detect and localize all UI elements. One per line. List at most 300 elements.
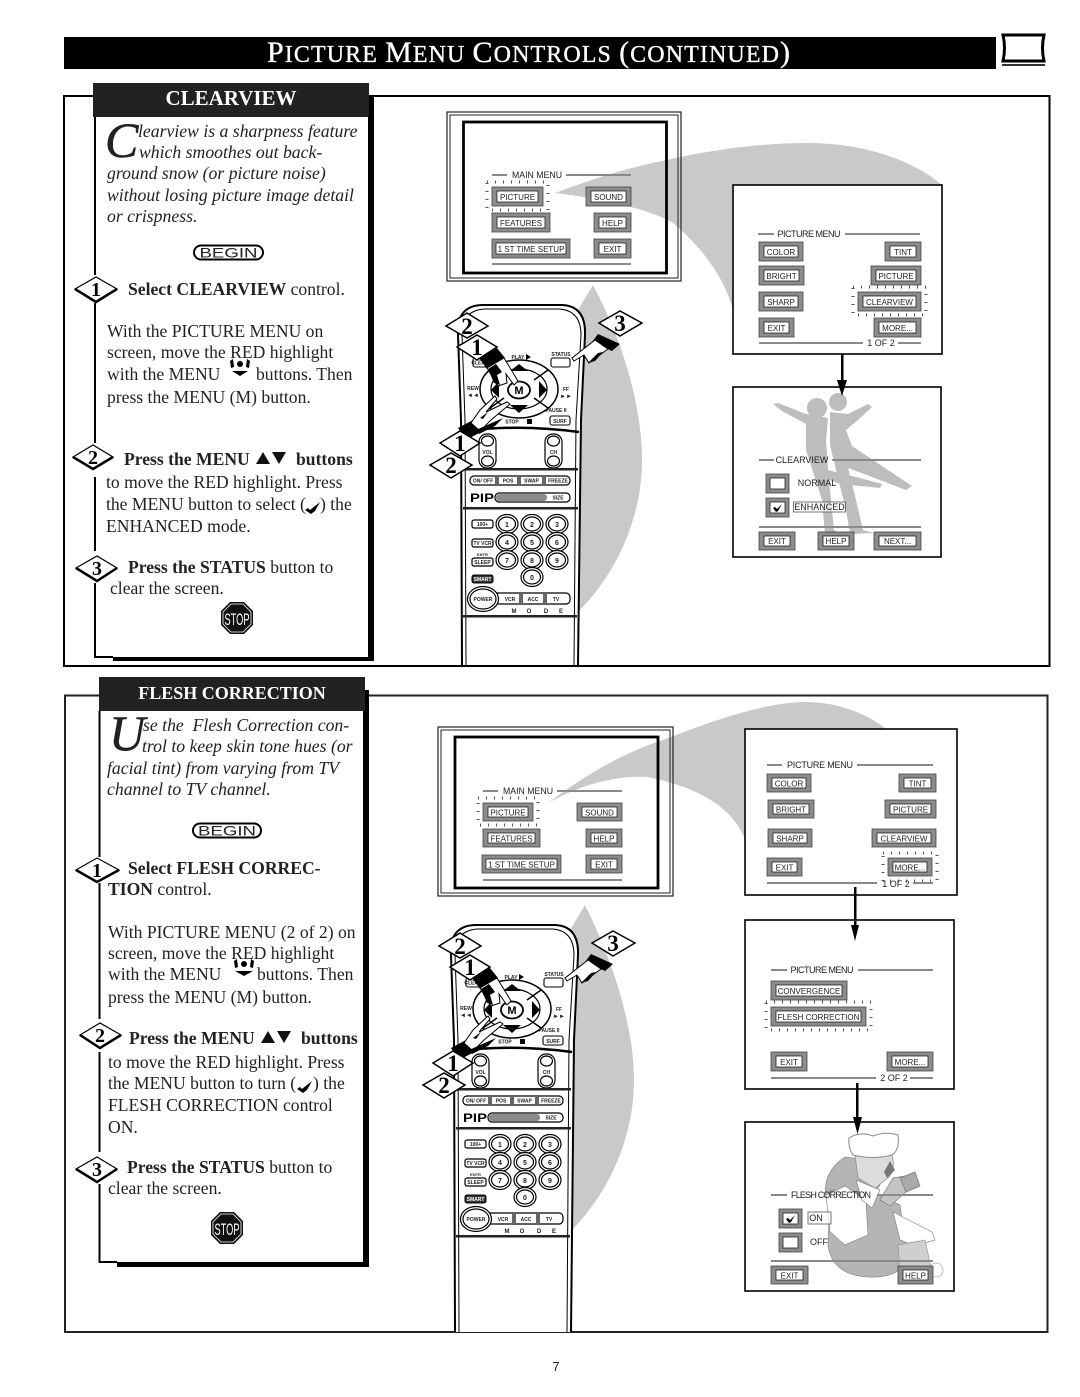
button: picture: PICTURE: [500, 193, 535, 202]
intro text: or crispness.: [107, 206, 197, 226]
title bar: [64, 36, 996, 69]
step 3 text: [110, 557, 333, 598]
top buttons: ►►: [560, 394, 572, 400]
remote control: flesh correction steps: [423, 925, 635, 1332]
number keys: 2: [530, 522, 534, 529]
power and mode keys: TV: [553, 597, 560, 603]
button: color: COLOR: [767, 248, 795, 257]
step markers on remote: [423, 931, 635, 1098]
pip controls: POS: [503, 478, 514, 484]
intro text: [107, 705, 353, 799]
picture menu screen: [733, 185, 942, 354]
menu title: PICTURE MENU: [787, 760, 853, 770]
number keys: 3: [555, 522, 559, 529]
checkbox: off: [779, 1233, 828, 1252]
hand: pressing status: [572, 334, 620, 363]
step 1 text: press the MENU (M) button.: [107, 387, 311, 407]
step 2 marker: [73, 445, 113, 469]
step 1 marker: 1: [91, 279, 101, 301]
illustration: sailor: [825, 1133, 943, 1280]
pip controls: [456, 1096, 571, 1130]
arrow: to flesh correction screen: [856, 1083, 858, 1119]
hand: pressing menu up: [479, 348, 518, 386]
number keys: 100+: [470, 1142, 481, 1148]
intro text: without losing picture image detail: [107, 185, 354, 205]
panel: clearview section frame: [64, 96, 1050, 666]
begin badge: [194, 244, 263, 260]
menu title: [492, 170, 631, 180]
top buttons: PAUSE II: [545, 408, 567, 414]
menu d-pad: [480, 360, 558, 418]
top buttons: FF: [556, 1007, 562, 1013]
top buttons: REW: [460, 1006, 472, 1012]
step 2 text: Press the MENU: [129, 1028, 255, 1048]
power and mode keys: ACC: [528, 597, 539, 603]
menu title: [483, 786, 622, 796]
number keys: 1: [498, 1142, 502, 1149]
step 1 text: screen, move the RED highlight: [107, 342, 333, 362]
begin badge: BEGIN: [200, 244, 258, 260]
number keys: SMART: [474, 577, 491, 583]
pip controls: ON/ OFF: [473, 478, 493, 484]
step 1 text: With PICTURE MENU (2 of 2) on: [108, 922, 356, 942]
pip controls: PIP: [470, 491, 494, 505]
step markers on remote: 1: [447, 1051, 459, 1076]
button: tint: TINT: [909, 780, 926, 788]
button: help: [898, 1266, 933, 1284]
main menu screen: [438, 727, 673, 896]
top buttons: REW: [467, 386, 479, 392]
step 2 text: Press the MENU: [124, 449, 250, 469]
step 3 text: Press the STATUS button to: [127, 1157, 332, 1177]
number keys: ENTR: [477, 552, 488, 557]
step 2 text: ENHANCED mode.: [106, 516, 251, 536]
intro text: se the Flesh Correction con-: [143, 715, 349, 735]
step 1 text: screen, move the RED highlight: [108, 943, 334, 963]
button: clearview: [872, 829, 936, 847]
step 2 text: to move the RED highlight. Press: [106, 472, 343, 492]
heading: clearview: [93, 83, 369, 117]
button: bright: [759, 266, 804, 285]
step 2 text: the MENU button to turn (: [108, 1073, 296, 1093]
step markers on remote: 1: [464, 955, 476, 980]
volume and channel keys: VOL: [482, 450, 493, 456]
step 2 text: the MENU button to select (: [106, 494, 306, 514]
button: tint: [899, 774, 936, 792]
checkbox: normal: NORMAL: [798, 478, 836, 488]
top buttons: PAUSE II: [538, 1028, 560, 1034]
hand: pressing menu up: [472, 968, 511, 1006]
step 2 marker: [80, 1023, 121, 1048]
top buttons: [467, 352, 572, 426]
gray swoosh from remote: [560, 285, 642, 612]
button: exit: EXIT: [768, 537, 786, 546]
button: more: [874, 318, 921, 337]
step markers on remote: 2: [438, 1073, 450, 1098]
begin badge: BEGIN: [198, 822, 256, 838]
step 1 marker: 1: [92, 860, 102, 882]
number keys: 3: [548, 1142, 552, 1149]
button: features: FEATURES: [500, 219, 542, 228]
button: picture: PICTURE: [878, 272, 914, 281]
button: flesh correction: [766, 1002, 871, 1030]
button: exit: EXIT: [780, 1058, 798, 1067]
button: sound: SOUND: [585, 808, 614, 818]
button: exit: EXIT: [595, 860, 613, 870]
button: convergence: CONVERGENCE: [778, 987, 840, 996]
button: help: HELP: [594, 834, 614, 844]
button: bright: BRIGHT: [776, 806, 806, 814]
number keys: 4: [498, 1160, 502, 1167]
intro text: facial tint) from varying from TV: [107, 758, 341, 778]
top buttons: SURF: [553, 419, 567, 425]
pip controls: SWAP: [517, 1098, 533, 1104]
button: bright: [768, 800, 814, 818]
step 1 marker: [75, 277, 117, 302]
button: picture: [871, 266, 921, 285]
icon: stop sign: STOP: [214, 1220, 240, 1239]
gray swoosh from remote: [552, 905, 634, 1232]
step markers on remote: [430, 311, 642, 478]
power and mode keys: ACC: [521, 1217, 532, 1223]
panel: flesh correction instructions: [76, 677, 369, 1267]
power and mode keys: TV: [546, 1217, 553, 1223]
checkbox: enhanced: [766, 498, 846, 517]
menu title: PICTURE MENU: [778, 229, 840, 239]
number keys: 5: [530, 540, 534, 547]
button: help: HELP: [826, 537, 846, 546]
number keys: 8: [530, 558, 534, 565]
picture menu screen page 1: [745, 729, 957, 895]
button: help: [818, 532, 854, 550]
power and mode keys: E: [559, 609, 563, 615]
top buttons: PLAY: [505, 975, 518, 981]
button: clearview: [853, 287, 926, 315]
top buttons: FF: [563, 387, 569, 393]
button: features: FEATURES: [490, 834, 533, 844]
page indicator: 1 OF 2: [882, 879, 910, 889]
intro text: C: [105, 112, 139, 168]
intro text: U: [109, 705, 148, 761]
power and mode keys: [456, 1206, 570, 1238]
intro text: channel to TV channel.: [107, 779, 271, 799]
button: exit: EXIT: [768, 324, 786, 333]
menu title: MAIN MENU: [512, 170, 562, 180]
icon: menu buttons: [234, 959, 254, 976]
hand: pressing status: [565, 954, 613, 983]
remote body: [458, 305, 585, 665]
gray swoosh from main menu to picture menu: [548, 702, 890, 840]
checkbox: enhanced: ENHANCED: [794, 502, 845, 512]
page indicator: 1 OF 2: [867, 338, 895, 348]
step markers on remote: 1: [471, 335, 483, 360]
top buttons: STATUS: [551, 352, 571, 358]
button: first time setup: [482, 855, 561, 873]
intro text: [105, 112, 358, 226]
step 2 text: ) the: [320, 494, 352, 514]
gray swoosh from main menu to picture menu: [555, 143, 942, 310]
checkbox: on: [779, 1209, 831, 1228]
top buttons: PLAY: [512, 355, 525, 361]
menu title: CLEARVIEW: [776, 455, 829, 465]
button: color: [759, 242, 803, 261]
power and mode keys: M: [504, 1229, 510, 1235]
icon: stop sign: [211, 1212, 243, 1244]
step 3 text: Press the STATUS button to: [128, 557, 333, 577]
hand: pressing menu down: [451, 1016, 503, 1060]
button: tint: [885, 242, 921, 261]
top buttons: SURF: [546, 1039, 560, 1045]
step 1 text: [107, 279, 353, 407]
number keys: 1: [505, 522, 509, 529]
button: first time setup: 1 ST TIME SETUP: [488, 860, 555, 870]
number keys: 4: [505, 540, 509, 547]
button: more: MORE...: [895, 864, 925, 872]
button: exit: [771, 1052, 807, 1071]
step 2 text: ) the: [313, 1073, 345, 1093]
button: first time setup: [492, 239, 570, 258]
step 2 text: buttons: [301, 1028, 358, 1048]
button: tint: TINT: [894, 248, 912, 257]
power and mode keys: VCR: [498, 1217, 509, 1223]
step 3 text: [108, 1157, 332, 1198]
button: first time setup: 1 ST TIME SETUP: [498, 245, 564, 254]
volume and channel keys: [456, 1048, 572, 1090]
button: bright: BRIGHT: [766, 272, 797, 281]
volume and channel keys: CH: [543, 1070, 550, 1076]
number keys: SLEEP: [474, 560, 491, 566]
button: exit: [594, 239, 631, 258]
number keys: 0: [530, 575, 534, 582]
icon: stop sign: [221, 602, 253, 634]
step markers on remote: 3: [607, 931, 619, 956]
button: exit: [767, 858, 802, 876]
menu title: PICTURE MENU: [790, 965, 854, 975]
step 1 marker: [76, 858, 119, 882]
button: help: HELP: [602, 219, 623, 228]
button: exit: [759, 318, 794, 337]
power and mode keys: [463, 586, 577, 618]
button: picture: PICTURE: [893, 806, 928, 814]
panel: flesh correction section frame: [65, 696, 1048, 1332]
step 2 text: buttons: [296, 449, 353, 469]
step 1 text: With the PICTURE MENU on: [107, 321, 323, 341]
button: picture: [885, 800, 936, 818]
menu d-pad: M: [507, 1005, 517, 1017]
button: picture: PICTURE: [490, 808, 526, 818]
button: picture: [478, 798, 538, 825]
menu d-pad: M: [514, 385, 524, 397]
button: help: [586, 829, 622, 847]
button: color: [767, 774, 811, 792]
power and mode keys: POWER: [467, 1217, 486, 1223]
number keys: TV VCR: [466, 1161, 485, 1167]
button: help: [594, 213, 631, 232]
number keys: [465, 1134, 561, 1206]
step 1 text: TION control.: [108, 879, 212, 899]
left rule: [100, 711, 117, 1262]
top buttons: ◄◄: [460, 1013, 472, 1019]
step 2 text: [106, 449, 353, 536]
remote control: clearview steps: [430, 305, 642, 665]
button: features: [492, 213, 550, 232]
button: exit: EXIT: [604, 245, 622, 254]
menu title: FLESH CORRECTION: [791, 1190, 871, 1200]
number keys: 100+: [477, 522, 488, 528]
icon: menu buttons: [230, 359, 250, 376]
step 2 marker: 2: [95, 1025, 105, 1047]
heading: flesh correction: FLESH CORRECTION: [138, 683, 326, 703]
button: next: [874, 532, 921, 550]
step 2 text: [108, 1028, 358, 1137]
checkbox: on: ON: [809, 1213, 823, 1223]
step markers on remote: 2: [454, 934, 466, 959]
page number: 7: [552, 1359, 560, 1374]
hand: pressing menu down: [458, 396, 510, 440]
number keys: 2: [523, 1142, 527, 1149]
power and mode keys: D: [537, 1229, 542, 1235]
button: sharp: [759, 292, 803, 311]
pip controls: FREEZE: [548, 478, 569, 484]
step markers on remote: 1: [454, 431, 466, 456]
step markers on remote: 3: [614, 311, 626, 336]
volume and channel keys: VOL: [475, 1070, 486, 1076]
power and mode keys: O: [520, 1229, 525, 1235]
volume and channel keys: CH: [550, 450, 557, 456]
top buttons: CLEAR: [471, 360, 489, 366]
top buttons: [460, 972, 565, 1046]
step 1 text: Select CLEARVIEW control.: [128, 279, 345, 299]
remote body: [451, 925, 578, 1332]
pip controls: POS: [496, 1098, 507, 1104]
step 2 text: ON.: [108, 1117, 138, 1137]
begin badge: [193, 822, 261, 838]
power and mode keys: VCR: [505, 597, 516, 603]
step 3 marker: 3: [92, 558, 102, 580]
power and mode keys: D: [544, 609, 549, 615]
number keys: 7: [498, 1178, 502, 1185]
step 1 text: [108, 858, 356, 1007]
volume and channel keys: [463, 428, 579, 470]
top buttons: STATUS: [544, 972, 564, 978]
number keys: 9: [548, 1178, 552, 1185]
step 1 text: Select FLESH CORREC-: [128, 858, 321, 878]
title bar: PICTURE MENU CONTROLS (CONTINUED): [267, 36, 790, 69]
page indicator: 2 OF 2: [880, 1073, 908, 1083]
number keys: 9: [555, 558, 559, 565]
clearview screen: [733, 380, 941, 557]
button: clearview: CLEARVIEW: [866, 298, 913, 307]
checkbox: normal: [766, 474, 836, 493]
button: sharp: SHARP: [776, 834, 804, 844]
step 1 text: with the MENU: [107, 364, 221, 384]
button: exit: [771, 1266, 808, 1284]
checkbox: off: OFF: [810, 1237, 828, 1247]
picture menu screen page 2: [745, 920, 954, 1089]
number keys: TV VCR: [473, 541, 492, 547]
intro text: trol to keep skin tone hues (or: [142, 736, 353, 756]
button: next: NEXT...: [884, 537, 911, 546]
menu d-pad: [473, 980, 551, 1038]
number keys: 7: [505, 558, 509, 565]
top buttons: CLEAR: [464, 980, 482, 986]
button: more: MORE...: [882, 324, 913, 333]
menu title: MAIN MENU: [503, 786, 553, 796]
step 1 text: with the MENU: [108, 964, 222, 984]
pip controls: PIP: [463, 1111, 487, 1125]
button: exit: EXIT: [776, 864, 794, 872]
step 1 text: buttons. Then: [256, 364, 353, 384]
power and mode keys: E: [552, 1229, 556, 1235]
step 1 text: buttons. Then: [257, 964, 354, 984]
top buttons: STOP: [505, 420, 519, 426]
button: clearview: CLEARVIEW: [881, 834, 928, 844]
number keys: 6: [548, 1160, 552, 1167]
button: sound: [577, 803, 622, 821]
step 3 text: clear the screen.: [108, 1178, 222, 1198]
intro text: learview is a sharpness feature: [138, 121, 358, 141]
step 2 text: FLESH CORRECTION control: [108, 1095, 333, 1115]
top buttons: ◄◄: [467, 393, 479, 399]
heading: clearview: CLEARVIEW: [165, 86, 297, 110]
number keys: 0: [523, 1195, 527, 1202]
intro text: which smoothes out back-: [139, 142, 322, 162]
number keys: 6: [555, 540, 559, 547]
button: sharp: SHARP: [767, 298, 795, 307]
power and mode keys: O: [527, 609, 532, 615]
number keys: 5: [523, 1160, 527, 1167]
icon: tv screen: [1002, 35, 1045, 66]
button: more: [883, 853, 937, 881]
button: sharp: [768, 829, 812, 847]
step 3 marker: [76, 556, 117, 581]
main menu screen: [447, 112, 681, 281]
button: more: MORE...: [895, 1058, 925, 1067]
step 3 marker: [76, 1157, 117, 1182]
illustration: skaters: [773, 393, 912, 534]
step 2 marker: 2: [88, 447, 98, 469]
power and mode keys: POWER: [474, 597, 493, 603]
panel: clearview instructions: [73, 83, 374, 661]
step markers on remote: 2: [461, 314, 473, 339]
step 3 marker: 3: [92, 1159, 102, 1181]
button: convergence: [771, 981, 847, 1000]
number keys: SMART: [467, 1197, 484, 1203]
button: more: [887, 1052, 933, 1071]
button: exit: [586, 855, 622, 873]
step markers on remote: 2: [445, 453, 457, 478]
icon: stop sign: STOP: [224, 610, 250, 629]
button: sound: [586, 187, 631, 206]
step 2 text: to move the RED highlight. Press: [108, 1052, 345, 1072]
step 3 text: clear the screen.: [110, 578, 224, 598]
top buttons: STOP: [498, 1040, 512, 1046]
number keys: 8: [523, 1178, 527, 1185]
number keys: SLEEP: [467, 1180, 484, 1186]
button: exit: [759, 532, 795, 550]
intro text: ground snow (or picture noise): [107, 163, 326, 183]
step 1 text: press the MENU (M) button.: [108, 987, 312, 1007]
button: sound: SOUND: [594, 193, 623, 202]
flesh correction screen: [745, 1117, 954, 1291]
button: color: COLOR: [775, 780, 803, 788]
pip controls: ON/ OFF: [466, 1098, 486, 1104]
pip controls: [463, 476, 578, 510]
pip controls: FREEZE: [541, 1098, 562, 1104]
button: picture: [487, 182, 548, 210]
pip controls: SIZE: [545, 1116, 557, 1122]
button: help: HELP: [905, 1272, 926, 1280]
